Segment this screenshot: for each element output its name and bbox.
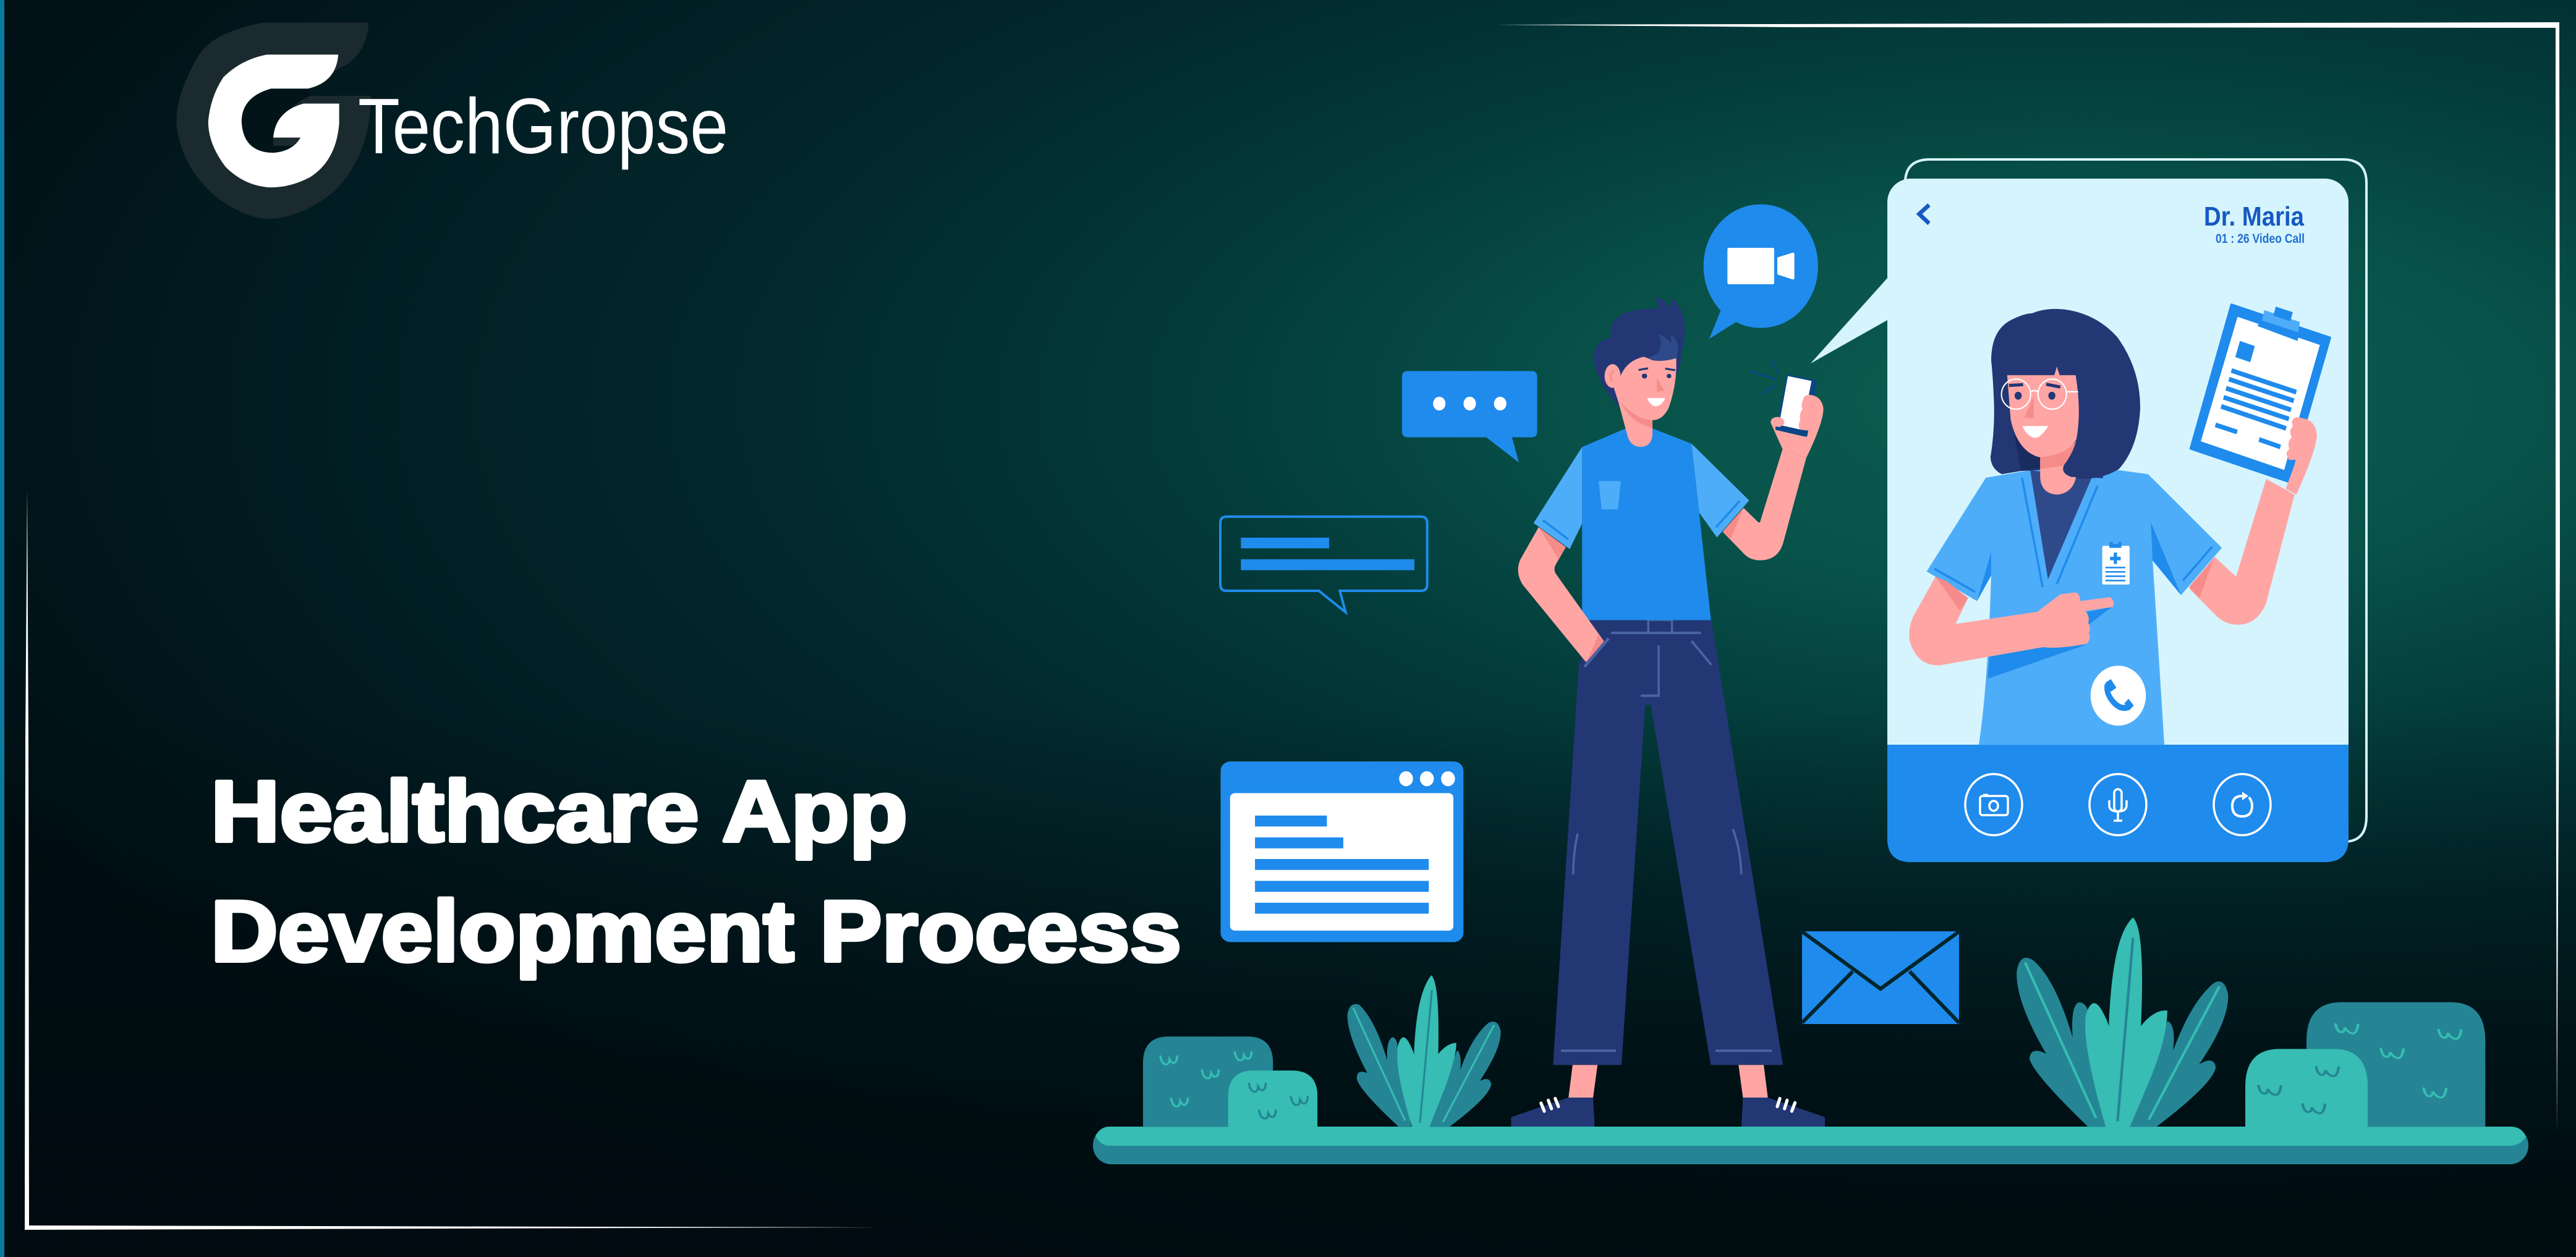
doctor scrub details [1934, 470, 2215, 679]
man trousers [1553, 620, 1783, 1065]
camera button [1965, 774, 2022, 836]
man arm on hip [1518, 527, 1604, 662]
man quiff [1648, 334, 1678, 361]
rotate button [2214, 774, 2271, 836]
doctor face [2007, 366, 2079, 457]
doctor name: Dr. Maria [2204, 201, 2304, 232]
doctor left arm pointing [1909, 577, 2114, 666]
ground platform [1093, 1127, 2528, 1164]
trouser details [1561, 620, 1772, 1051]
doctor hair [1991, 309, 2140, 479]
frame: bottom left corner [25, 489, 878, 1230]
microphone button [2089, 774, 2146, 836]
title line 1: Healthcare App [211, 763, 908, 860]
phone speech tail [1811, 278, 1887, 363]
doctor arm shadow [1936, 577, 1968, 611]
man ear [1605, 364, 1620, 388]
right bushes [2245, 1002, 2485, 1127]
pocket edge [1584, 638, 1609, 667]
doctor neck [2040, 451, 2077, 494]
phone back outline [1905, 159, 2366, 842]
message lines [1241, 538, 1414, 570]
logo mark [177, 23, 371, 219]
doctor facial features [2009, 384, 2060, 438]
video camera icon [1727, 248, 1795, 284]
phone video call screen [1887, 179, 2349, 862]
doctor scrubs [1927, 470, 2222, 745]
phone bottom bar [1887, 745, 2349, 862]
outlined message bubble [1220, 517, 1427, 612]
raised arm shadow [1723, 508, 1743, 539]
shirt pocket [1599, 481, 1621, 509]
phone bottom band [1775, 426, 1808, 437]
man raised arm [1723, 449, 1806, 561]
window page [1230, 793, 1453, 931]
man upper body [1518, 297, 1824, 667]
man neck and face [1614, 357, 1677, 447]
background lower fade [0, 711, 2576, 1257]
logo [177, 23, 728, 219]
man hair [1593, 297, 1685, 407]
doctor hair lock [2063, 436, 2103, 478]
right plants [2017, 918, 2485, 1127]
frame: top right corner [1495, 22, 2560, 1135]
envelope fold lines [1801, 931, 1960, 1023]
video call bubble [1704, 205, 1818, 339]
man legs [1511, 620, 1825, 1127]
left leafy plant [1348, 975, 1501, 1127]
man hand [1770, 395, 1824, 458]
title [211, 763, 1181, 980]
smartphone [1775, 374, 1817, 437]
man sleeves [1534, 444, 1749, 549]
man figure [1511, 297, 1825, 1127]
shoe laces [1541, 1099, 1795, 1111]
browser window [1220, 761, 1463, 942]
clipboard [2191, 305, 2330, 481]
doctor right arm [2190, 479, 2295, 625]
man ankles [1568, 1065, 1768, 1098]
doctor hand [2285, 417, 2317, 494]
left bushes [1143, 1036, 1317, 1127]
doctor glasses [2002, 379, 2078, 409]
envelope [1801, 931, 1960, 1024]
arm shadows [1539, 527, 1604, 661]
typing bubble [1402, 371, 1537, 462]
typing dots [1433, 397, 1507, 410]
sleeve hems [1543, 501, 1740, 540]
handset icon [2105, 679, 2134, 710]
left plants [1143, 975, 1501, 1127]
call button [2091, 666, 2146, 726]
doctor figure [1909, 305, 2330, 745]
man neck shadow [1620, 401, 1652, 428]
phone screen body [1887, 179, 2349, 862]
left edge stripe [0, 0, 4, 1257]
id badge [2102, 538, 2130, 585]
right leafy plant [2017, 918, 2228, 1127]
phone signal rays [1749, 358, 1779, 394]
doctor neck shadow [2040, 440, 2077, 469]
logo wordmark: TechGropse [358, 82, 728, 170]
man t-shirt [1582, 428, 1711, 620]
man facial features [1639, 368, 1675, 407]
doctor hair shadow [2014, 436, 2040, 471]
window text lines [1255, 816, 1429, 913]
back chevron [1919, 205, 1929, 224]
call timer: 01 : 26 Video Call [2216, 232, 2305, 246]
man shoes [1511, 1098, 1825, 1127]
window dots [1399, 771, 1455, 786]
title line 2: Development Process [211, 882, 1181, 980]
